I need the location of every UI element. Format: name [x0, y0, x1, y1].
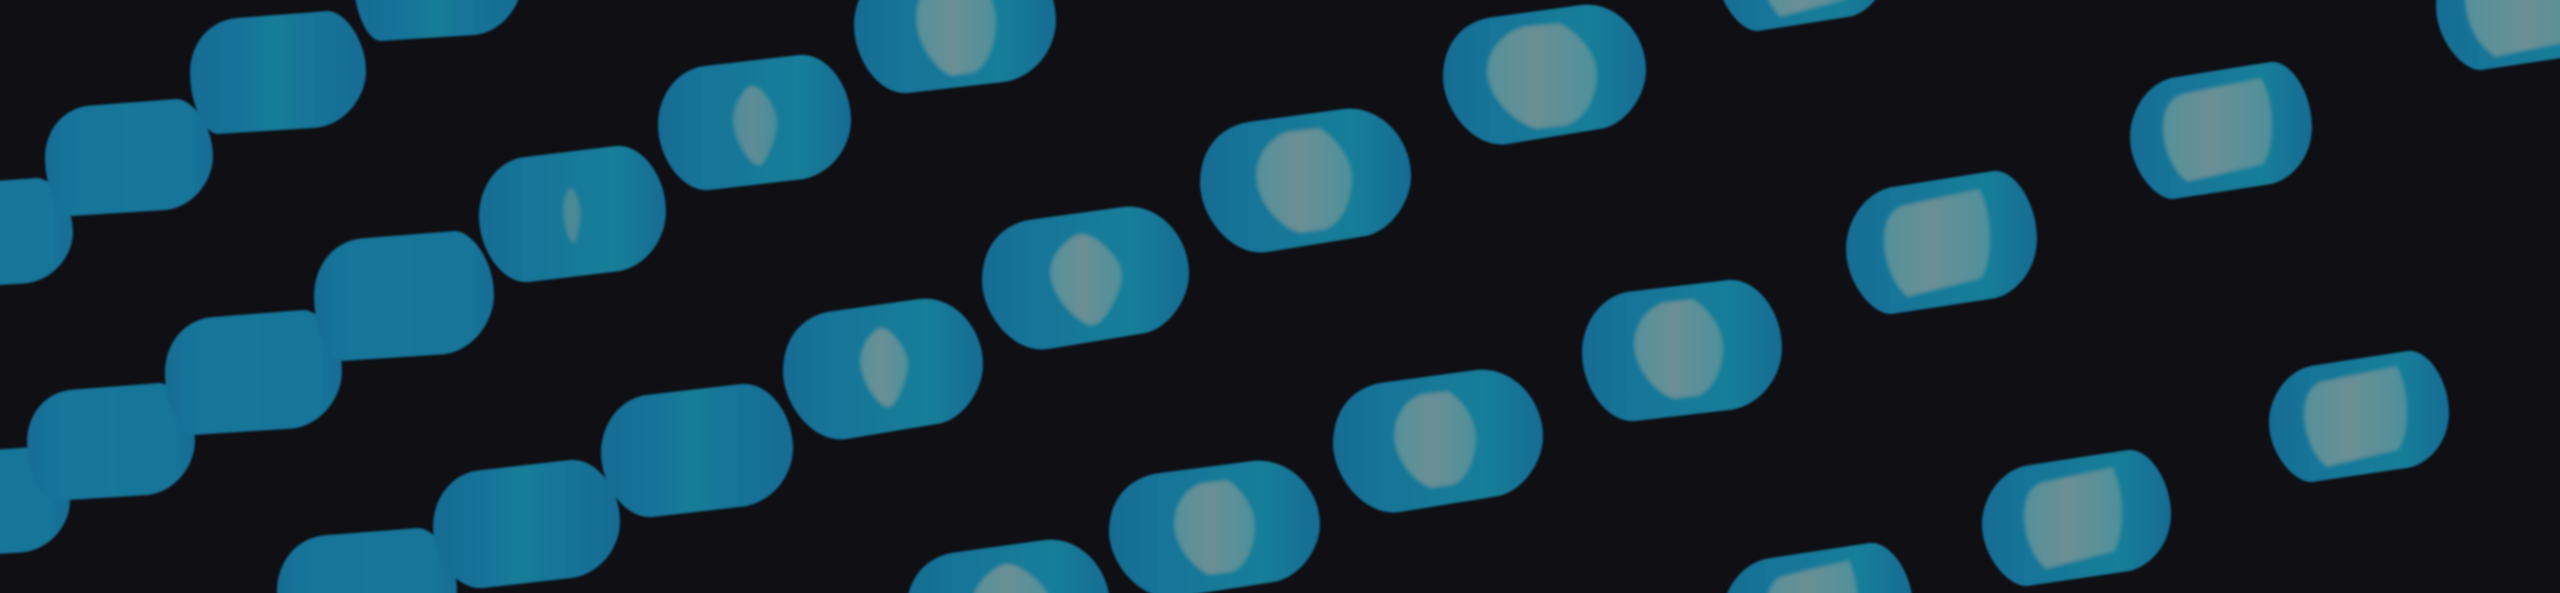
capsule: row 5 third	[2269, 351, 2449, 482]
capsule: row 3 fifth	[982, 207, 1189, 350]
capsule with lens highlight	[658, 55, 851, 190]
capsule: top edge clipped	[1717, 0, 1888, 31]
capsule: row 2 fourth	[314, 231, 494, 361]
capsule: row 3 third	[601, 384, 793, 517]
capsule: row 2 second	[27, 383, 195, 501]
capsule: row 5 bottom	[1722, 543, 1913, 593]
capsule: top right corner clipped	[2436, 0, 2560, 70]
capsule: row 2 third	[165, 310, 342, 435]
capsule with thin highlight	[479, 146, 666, 282]
capsule: row 4 fifth	[1846, 171, 2037, 314]
capsule: row 4 fourth	[1582, 280, 1782, 421]
capsule with top highlight	[854, 0, 1056, 93]
capsule: row 1 top edge	[354, 0, 522, 41]
capsule: row 4 third	[1333, 370, 1543, 513]
capsule: row 3 bottom	[277, 528, 457, 593]
capsule: row 3 seventh	[1443, 5, 1646, 145]
capsule: row 5 second	[1982, 450, 2171, 586]
capsule: row 1 far left	[0, 178, 73, 289]
capsule: row 2 far left	[0, 447, 70, 558]
capsule: row 3 fourth	[783, 299, 983, 440]
capsule: bottom edge clipped	[906, 540, 1110, 593]
capsule: row 1 second	[45, 99, 213, 216]
capsule: row 4 sixth	[2130, 62, 2312, 199]
capsule: row 1 third	[190, 11, 366, 134]
capsule: row 3 sixth	[1200, 109, 1411, 253]
capsule: row 3 second	[433, 460, 620, 588]
capsule: row 4 second	[1109, 461, 1320, 593]
